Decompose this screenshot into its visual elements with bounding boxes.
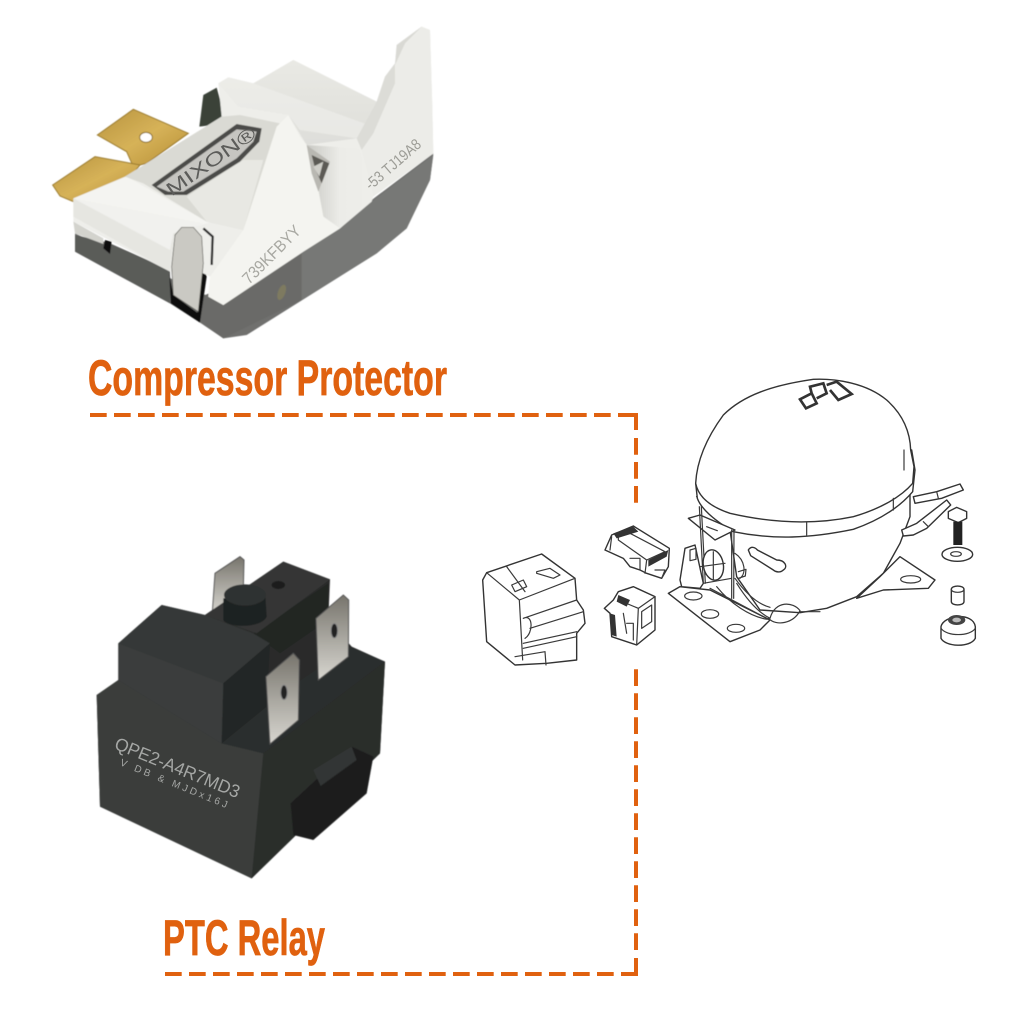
diagram: relay cover xyxy=(483,554,585,665)
side pipe stub xyxy=(748,547,786,572)
dashed connector: relay to diagram xyxy=(165,669,636,974)
heading: Compressor Protector: Compressor Protector xyxy=(88,350,447,406)
photo: compressor protector xyxy=(53,27,433,338)
compressor dome band xyxy=(696,450,915,537)
dashed connector: protector to diagram xyxy=(90,415,636,503)
diagram: compressor protector part xyxy=(605,526,669,578)
spacer sleeve xyxy=(951,586,964,605)
bracket and terminal xyxy=(688,515,735,540)
mounting bolt xyxy=(948,507,967,523)
photo: PTC relay xyxy=(97,557,385,878)
mounting plate left xyxy=(668,587,770,642)
compressor dome xyxy=(696,379,914,522)
marking: model number: QPE2-A4R7MD3 xyxy=(112,733,243,802)
diagram: PTC relay part xyxy=(604,587,655,645)
marking: part code 53 TJ19A8: -53 TJ19A8 xyxy=(362,136,425,194)
marking: MIXON logo: MIXON® xyxy=(162,122,260,200)
marking: part code 739KFBYY: 739KFBYY xyxy=(238,221,305,288)
pipes xyxy=(913,484,963,503)
compressor lower body xyxy=(697,493,910,613)
compressor logo xyxy=(800,382,852,408)
diagram: compressor xyxy=(668,379,975,645)
washer xyxy=(942,547,973,561)
marking: batch code: V DB & MJDx16J xyxy=(118,758,229,811)
compressor mounting foot right xyxy=(857,557,935,598)
heading: PTC Relay: PTC Relay xyxy=(163,910,325,966)
rubber grommet xyxy=(941,617,975,645)
